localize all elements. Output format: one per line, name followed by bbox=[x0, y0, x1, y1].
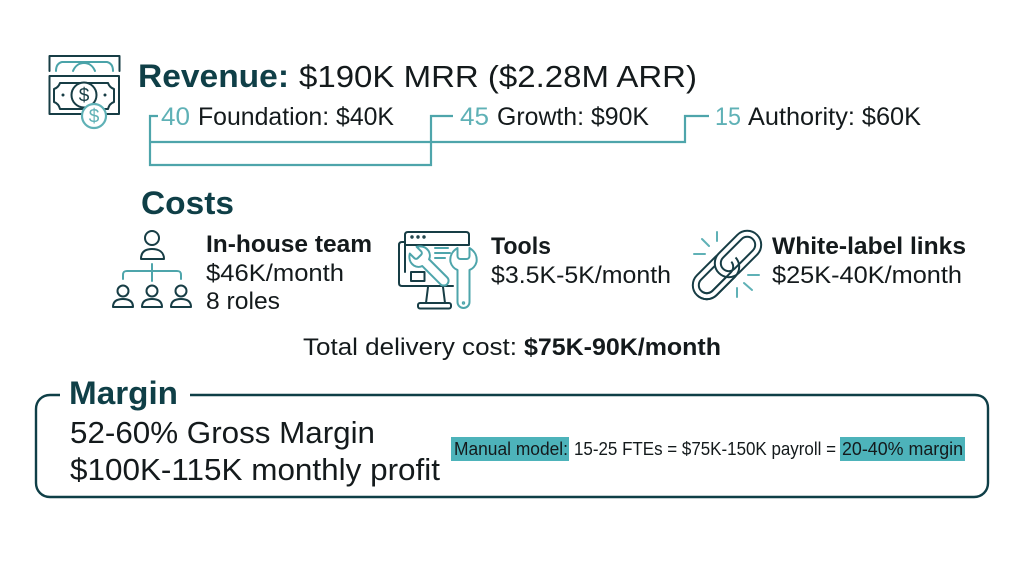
manual model comparison bbox=[451, 437, 965, 461]
total delivery cost: $75K-90K/month bbox=[524, 334, 721, 361]
panel: revenue bbox=[50, 56, 921, 165]
icon: monitor with wrenches bbox=[399, 232, 477, 308]
tier: foundation: 40 bbox=[161, 103, 190, 131]
icon: team hierarchy bbox=[113, 231, 191, 307]
manual model comparison: 20-40% margin bbox=[842, 439, 963, 459]
margin figures: 52-60% Gross Margin bbox=[70, 415, 375, 450]
tier: authority: 15 bbox=[715, 103, 741, 131]
margin heading: Margin bbox=[69, 375, 178, 411]
cost item: tools: $3.5K-5K/month bbox=[491, 262, 671, 289]
bracket connectors bbox=[150, 116, 709, 165]
cost item: white-label links: $25K-40K/month bbox=[772, 262, 962, 289]
cost item: white-label links bbox=[772, 233, 966, 289]
cost item: in-house team: $46K/month bbox=[206, 260, 344, 287]
costs heading: Costs bbox=[141, 185, 234, 221]
cost item: tools bbox=[491, 233, 671, 289]
cost item: tools: Tools bbox=[491, 233, 551, 260]
revenue heading: $190K MRR ($2.28M ARR) bbox=[299, 59, 697, 94]
icon: money bills: $ bbox=[89, 106, 100, 128]
revenue heading bbox=[138, 58, 697, 94]
cost item: white-label links: White-label links bbox=[772, 233, 966, 260]
tier: growth: 45 bbox=[460, 103, 489, 131]
manual model comparison: Manual model: bbox=[454, 439, 568, 459]
total delivery cost: Total delivery cost: bbox=[303, 334, 517, 361]
cost item: in-house team: 8 roles bbox=[206, 288, 280, 315]
panel: costs bbox=[113, 185, 966, 361]
margin figures: $100K-115K monthly profit bbox=[70, 452, 440, 487]
infographic bbox=[34, 55, 990, 498]
panel: margin bbox=[36, 375, 988, 497]
total delivery cost bbox=[303, 334, 721, 361]
margin figures bbox=[70, 415, 440, 487]
manual model comparison: 15-25 FTEs = $75K-150K payroll = bbox=[574, 439, 836, 459]
tier: foundation: Foundation: $40K bbox=[198, 103, 394, 131]
icon: money bills: $ bbox=[79, 86, 90, 106]
cost item: in-house team: In-house team bbox=[206, 231, 372, 258]
cost item: in-house team bbox=[206, 231, 372, 315]
margin box outline bbox=[36, 395, 988, 497]
tier: authority: Authority: $60K bbox=[748, 103, 921, 131]
icon: money bills bbox=[50, 56, 120, 128]
revenue heading: Revenue: bbox=[138, 58, 289, 94]
tier: growth: Growth: $90K bbox=[497, 103, 649, 131]
icon: chain link bbox=[692, 230, 762, 300]
